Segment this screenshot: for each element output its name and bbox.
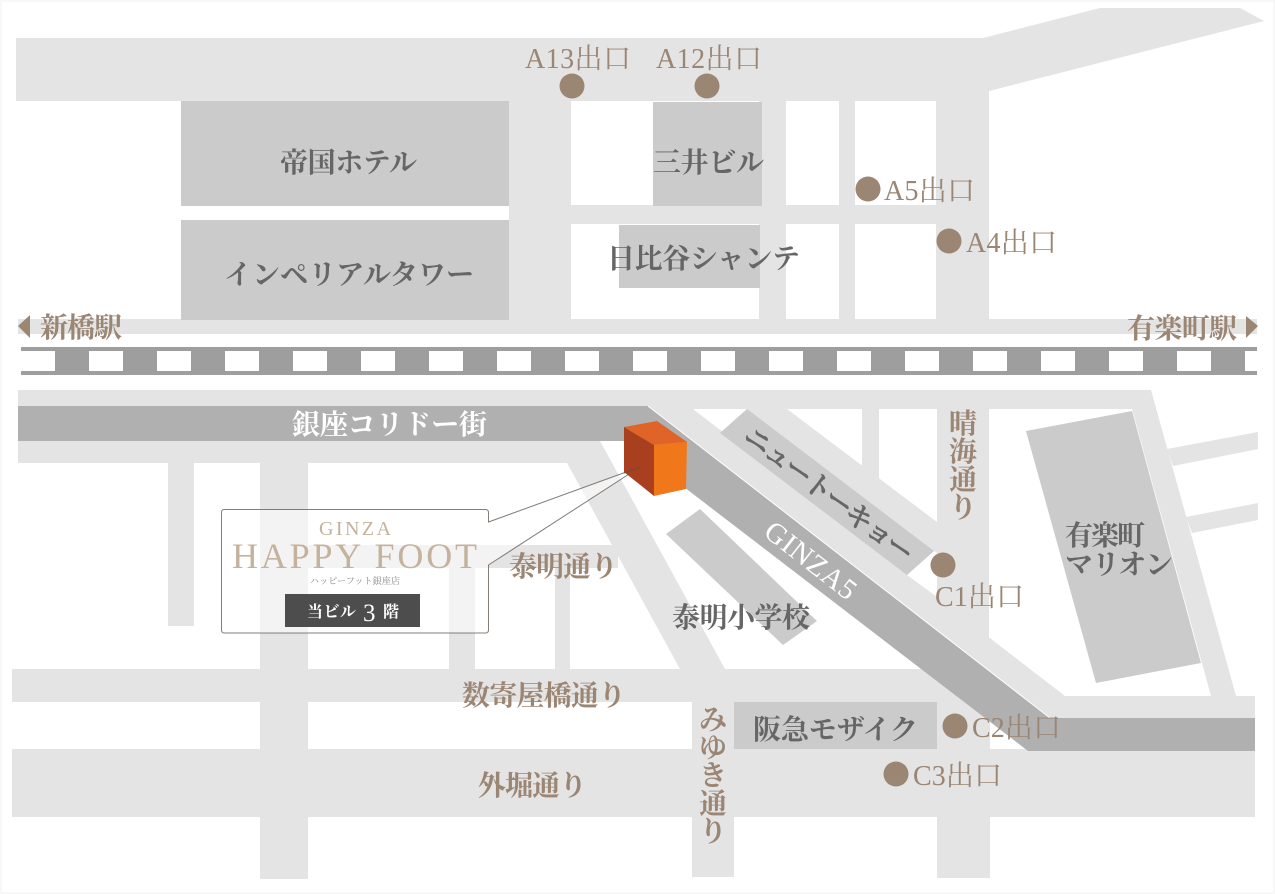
label: Taimei street: 泰明通り: [509, 551, 618, 583]
main road: Ginza Corridor and GINZA5: [18, 406, 1255, 751]
arrow: toward Shimbashi: [18, 315, 30, 338]
label: Harumi street: 晴: [949, 408, 977, 440]
label: Yurakucho Station: 有楽町駅: [1127, 313, 1237, 345]
exit C1: C1出口: [935, 581, 1024, 613]
label: New Tokyo: ニュートーキョー: [737, 420, 919, 570]
label: Yurakucho Marion: マリオン: [1065, 550, 1173, 581]
label: Harumi street: 海: [949, 436, 977, 468]
exit C2: C2出口: [972, 712, 1061, 744]
label: Harumi street: り: [949, 493, 977, 524]
label: Yurakucho Marion: [1065, 520, 1173, 581]
label: Ginza Corridor: 銀座コリドー街: [292, 409, 487, 441]
label: Taimei school: 泰明小学校: [672, 602, 812, 634]
label: Shimbashi Station: 新橋駅: [40, 312, 122, 344]
floor badge: 階: [383, 603, 399, 621]
shop name: GINZA: GINZA: [319, 518, 392, 540]
label: Mitsui Building: 三井ビル: [653, 147, 764, 179]
label: Miyuki street: き: [699, 761, 727, 792]
exit A13: A13出口: [525, 43, 631, 75]
exit A13: [525, 43, 631, 98]
label: GINZA5: GINZA5: [758, 515, 863, 607]
railway track: [21, 347, 1257, 375]
label: Miyuki street: り: [699, 817, 727, 848]
exit C3: C3出口: [913, 760, 1002, 792]
exit A5: A5出口: [884, 175, 975, 207]
label: Sukiyabashi street: 数寄屋橋通り: [462, 680, 626, 712]
label: Sotobori street: 外堀通り: [478, 770, 587, 802]
exit A4: A4出口: [966, 227, 1057, 259]
exit A12: A12出口: [656, 43, 762, 75]
callout box with pointer: [222, 467, 640, 633]
buildings: [181, 101, 1201, 749]
label: Hankyu Mosaic: 阪急モザイク: [753, 714, 918, 746]
label: Miyuki street: 通: [699, 788, 727, 820]
label: Yurakucho Marion: 有楽町: [1065, 520, 1145, 552]
exit A12: [656, 43, 762, 98]
road edge highlight: [648, 406, 1050, 718]
shop name in Japanese: ハッピーフット銀座店: [310, 575, 400, 586]
floor badge: 3: [363, 600, 376, 627]
arrow: toward Yurakucho: [1246, 316, 1258, 338]
icon: orange building cube: [624, 421, 687, 496]
label: Miyuki street: み: [699, 705, 727, 736]
label: Imperial Tower: インペリアルタワー: [224, 260, 474, 291]
label: Imperial Hotel: 帝国ホテル: [280, 147, 417, 179]
label: Harumi street: 通: [949, 464, 977, 496]
exit C1: [930, 552, 1024, 613]
label: Hibiya Chanter: 日比谷シャンテ: [607, 243, 800, 275]
shop name: HAPPY FOOT: HAPPY FOOT: [232, 536, 477, 576]
floor badge: [285, 594, 420, 627]
label: Miyuki street: ゆ: [699, 733, 727, 764]
white block near C1 exit: [907, 551, 937, 597]
floor badge: 当ビル: [307, 602, 356, 621]
